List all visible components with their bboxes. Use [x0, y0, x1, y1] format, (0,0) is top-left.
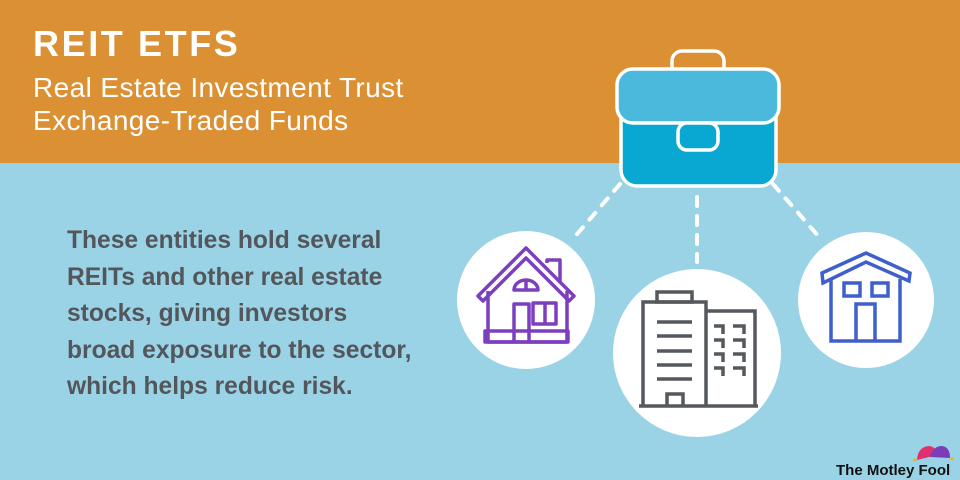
body text: which helps reduce risk.	[67, 373, 353, 400]
subtitle: Exchange-Traded Funds	[33, 105, 349, 136]
body text	[67, 227, 411, 400]
subtitle	[33, 72, 404, 136]
body text: These entities hold several	[67, 227, 381, 254]
icon: office buildings circle	[613, 269, 781, 437]
title: REIT ETFS	[33, 23, 240, 64]
body text: broad exposure to the sector,	[67, 336, 411, 364]
icon: briefcase	[617, 51, 779, 186]
subtitle: Real Estate Investment Trust	[33, 72, 404, 103]
logo: The Motley Fool: The Motley Fool	[836, 462, 950, 479]
dashed connectors	[572, 184, 820, 262]
logo: The Motley Fool	[836, 446, 954, 479]
body text: REITs and other real estate	[67, 264, 382, 290]
body text: stocks, giving investors	[67, 300, 347, 327]
icon: simple house circle	[798, 232, 934, 368]
icon: house circle	[457, 231, 595, 369]
